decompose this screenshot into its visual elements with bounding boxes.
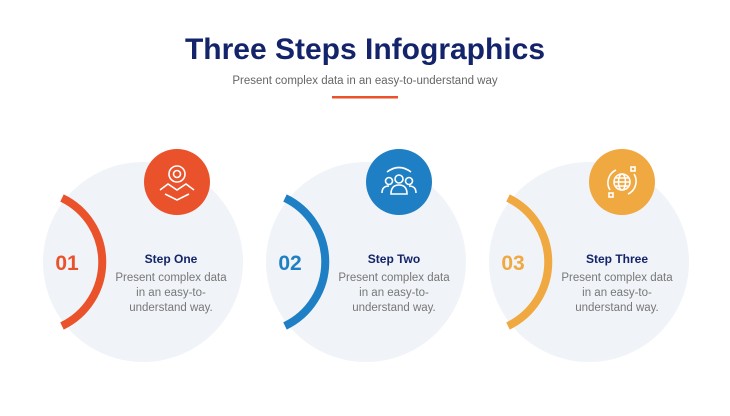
body text: in an easy-to- xyxy=(136,287,206,299)
panel: step one xyxy=(43,149,243,362)
icon: team xyxy=(366,149,432,215)
number 03: 03 xyxy=(501,252,525,275)
title: Three Steps Infographics xyxy=(185,33,545,66)
panel: step three xyxy=(489,149,689,362)
icon: globe xyxy=(589,149,655,215)
number 01: 01 xyxy=(55,252,79,275)
accent line xyxy=(332,96,398,98)
panel: step two xyxy=(266,149,466,362)
body text: understand way. xyxy=(575,302,659,314)
heading: Step Three xyxy=(586,252,648,266)
icon: handshake gear xyxy=(144,149,210,215)
heading: Step One xyxy=(145,252,198,266)
body text: understand way. xyxy=(129,302,213,314)
body text: in an easy-to- xyxy=(359,287,429,299)
body text: understand way. xyxy=(352,302,436,314)
number 02: 02 xyxy=(278,252,302,275)
heading: Step Two xyxy=(368,252,420,266)
body text: in an easy-to- xyxy=(582,287,652,299)
body text: Present complex data xyxy=(115,272,227,284)
body text: Present complex data xyxy=(338,272,450,284)
body text: Present complex data xyxy=(561,272,673,284)
subtitle: Present complex data in an easy-to-understand way xyxy=(232,75,498,87)
